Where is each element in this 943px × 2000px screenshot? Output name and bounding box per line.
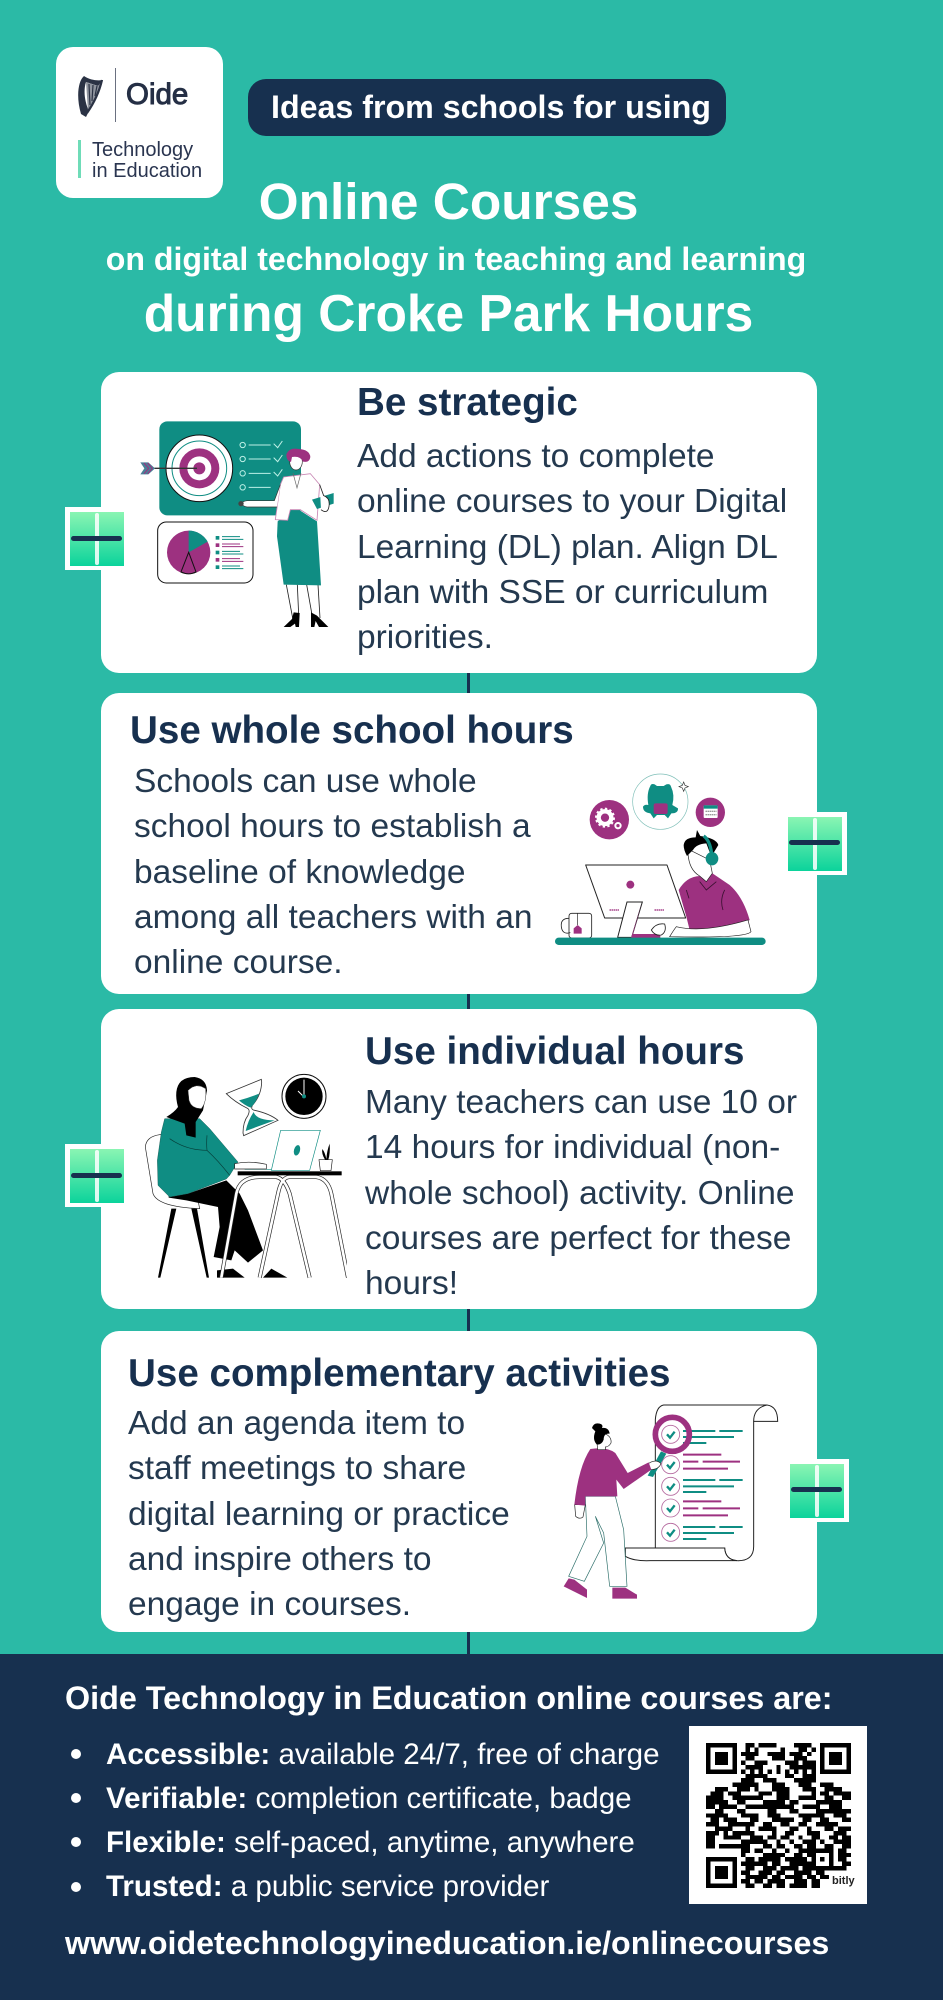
bitly mark: bitly (832, 1875, 855, 1887)
qr code (689, 1726, 867, 1904)
body text: Schools can use whole (134, 763, 477, 800)
title: online courses: Online Courses (259, 172, 638, 230)
logo name: Oide (126, 78, 188, 111)
subtitle: on digital technology in teaching and learning (106, 241, 806, 277)
bullet: trusted: Trusted: a public service provider (106, 1870, 549, 1903)
bullet: accessible: Accessible: available 24/7, free of charge (106, 1738, 660, 1771)
logo (56, 47, 223, 198)
heading: Use whole school hours (130, 709, 574, 752)
icon: plus tile 1 (65, 507, 124, 570)
body text (134, 763, 532, 981)
body text (128, 1405, 510, 1623)
illustration: man at computer (555, 774, 766, 945)
body text: online course. (134, 944, 343, 981)
bullet dot (71, 1837, 81, 1847)
pill heading (248, 79, 726, 136)
body text: online courses to your Digital (357, 483, 787, 520)
body text: courses are perfect for these (365, 1220, 791, 1257)
icon: plus tile 4 (790, 1459, 849, 1522)
bullet dot (71, 1793, 81, 1803)
logo subtitle: Technology (92, 139, 193, 161)
bullet dot (71, 1882, 81, 1892)
body text (357, 438, 787, 656)
qr pattern (706, 1743, 851, 1888)
body text: among all teachers with an (134, 899, 532, 936)
body text: and inspire others to (128, 1541, 432, 1578)
body text: staff meetings to share (128, 1450, 466, 1487)
body text: priorities. (357, 619, 493, 656)
heading: Use individual hours (365, 1030, 744, 1073)
body text: plan with SSE or curriculum (357, 574, 768, 611)
logo green bar (78, 140, 81, 178)
body text: school hours to establish a (134, 808, 531, 845)
body text: whole school) activity. Online (365, 1175, 794, 1212)
illustration: woman at laptop (145, 1074, 347, 1278)
body text: Learning (DL) plan. Align DL (357, 529, 778, 566)
heading: Be strategic (357, 381, 578, 424)
icon: plus tile 3 (65, 1144, 124, 1207)
icon: harp (78, 76, 103, 117)
logo subtitle: in Education (92, 160, 202, 182)
panel: use complementary activities (101, 1331, 817, 1632)
icon: plus tile 2 (788, 812, 847, 875)
title: croke park: during Croke Park Hours (144, 284, 753, 342)
logo divider (115, 68, 116, 122)
body text: Many teachers can use 10 or (365, 1084, 797, 1121)
logo subtitle (92, 139, 202, 182)
illustration: woman presenting target (140, 421, 334, 627)
panel: use whole school hours (101, 693, 817, 994)
website url: www.oidetechnologyineducation.ie/onlinecourses (65, 1925, 829, 1961)
body text: hours! (365, 1265, 458, 1302)
body text (365, 1084, 797, 1302)
body text: Add an agenda item to (128, 1405, 465, 1442)
pill text: Ideas from schools for using (271, 89, 711, 125)
panel: use individual hours (101, 1009, 817, 1309)
panel: footer (0, 1654, 943, 2000)
body text: Add actions to complete (357, 438, 715, 475)
panel: be strategic (101, 372, 817, 673)
body text: 14 hours for individual (non- (365, 1129, 780, 1166)
body text: engage in courses. (128, 1586, 411, 1623)
heading: Use complementary activities (128, 1352, 670, 1395)
body text: baseline of knowledge (134, 854, 466, 891)
bullet: verifiable: Verifiable: completion certificate, badge (106, 1782, 632, 1815)
illustration: woman with checklist (564, 1404, 778, 1599)
connector lines (467, 673, 470, 1654)
footer heading: Oide Technology in Education online courses are: (65, 1680, 832, 1716)
body text: digital learning or practice (128, 1496, 510, 1533)
bullet dot (71, 1749, 81, 1759)
bullet: flexible: Flexible: self-paced, anytime, anywhere (106, 1826, 635, 1859)
